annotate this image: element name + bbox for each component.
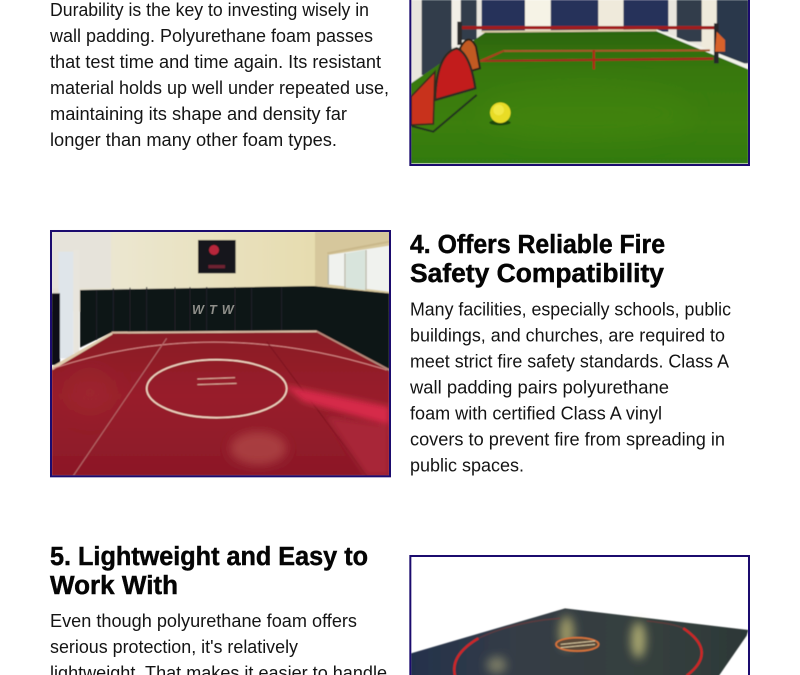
text block: durability paragraph: that test time and time again. Its resistant: [50, 52, 381, 72]
text block: durability paragraph: longer than many other foam types.: [50, 130, 337, 150]
heading: section 4: [410, 231, 665, 288]
text block: durability paragraph: [49, 0, 389, 150]
text block: durability paragraph: Durability is the key to investing wisely in: [50, 0, 369, 20]
text block: fire safety paragraph: public spaces.: [410, 456, 524, 476]
text block: fire safety paragraph: buildings, and churches, are required to: [410, 326, 725, 346]
photo: indoor turf room with yellow ball: [410, 0, 749, 165]
heading: section 4: 4. Offers Reliable Fire: [410, 231, 665, 259]
text block: durability paragraph: maintaining its shape and density far: [50, 104, 347, 124]
heading: section 5: 5. Lightweight and Easy to: [50, 543, 368, 571]
text block: durability paragraph: wall padding. Polyurethane foam passes: [49, 26, 373, 46]
text block: lightweight paragraph: Even though polyurethane foam offers: [50, 611, 357, 631]
text block: fire safety paragraph: Many facilities, especially schools, public: [410, 300, 731, 320]
photo: black wrestling mat with red circle: [410, 556, 749, 675]
text block: lightweight paragraph: [50, 611, 387, 675]
heading: section 4: Safety Compatibility: [410, 260, 665, 288]
text block: fire safety paragraph: meet strict fire safety standards. Class A: [410, 352, 729, 372]
text block: fire safety paragraph: covers to prevent fire from spreading in: [410, 430, 725, 450]
text block: fire safety paragraph: [409, 300, 731, 476]
wall lettering: WTW: [192, 303, 235, 317]
photo: red wrestling mat room: [51, 231, 390, 476]
text block: lightweight paragraph: serious protection, it's relatively: [50, 637, 298, 657]
text block: durability paragraph: material holds up well under repeated use,: [50, 78, 389, 98]
heading: section 5: Work With: [50, 572, 178, 600]
text block: fire safety paragraph: wall padding pairs polyurethane: [409, 378, 669, 398]
heading: section 5: [50, 543, 368, 600]
text block: fire safety paragraph: foam with certified Class A vinyl: [410, 404, 662, 424]
